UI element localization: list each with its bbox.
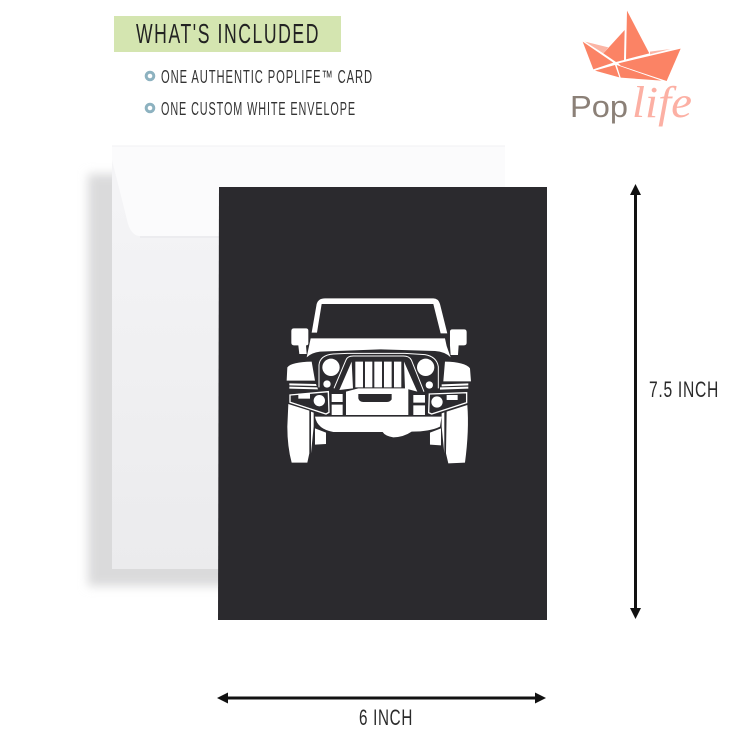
included items list: ONE AUTHENTIC POPLIFE™ CARD <box>161 67 373 87</box>
jeep grille <box>339 362 417 392</box>
jeep underbody <box>315 417 442 437</box>
logo: Poplife paper boat: life <box>632 78 692 127</box>
jeep windshield <box>312 298 447 333</box>
card: black pop-up card <box>218 187 547 620</box>
included items list <box>146 67 373 119</box>
jeep fenders <box>287 362 471 381</box>
arrow: height dimension <box>630 184 641 619</box>
label: 6 inch: 6 INCH <box>359 705 413 730</box>
jeep hood <box>307 338 451 357</box>
heading: what's included: WHAT'S INCLUDED <box>136 18 320 49</box>
jeep headlights <box>322 359 340 376</box>
logo: Poplife paper boat: Pop <box>570 89 628 124</box>
illustration: white jeep front <box>287 298 471 463</box>
jeep tires <box>287 404 314 463</box>
jeep mirrors <box>291 328 467 355</box>
envelope <box>88 146 505 586</box>
heading: what's included <box>114 16 341 52</box>
jeep bumper <box>346 388 408 415</box>
arrow: width dimension <box>217 692 546 704</box>
logo: Poplife paper boat <box>570 11 692 127</box>
included items list: ONE CUSTOM WHITE ENVELOPE <box>161 99 356 119</box>
